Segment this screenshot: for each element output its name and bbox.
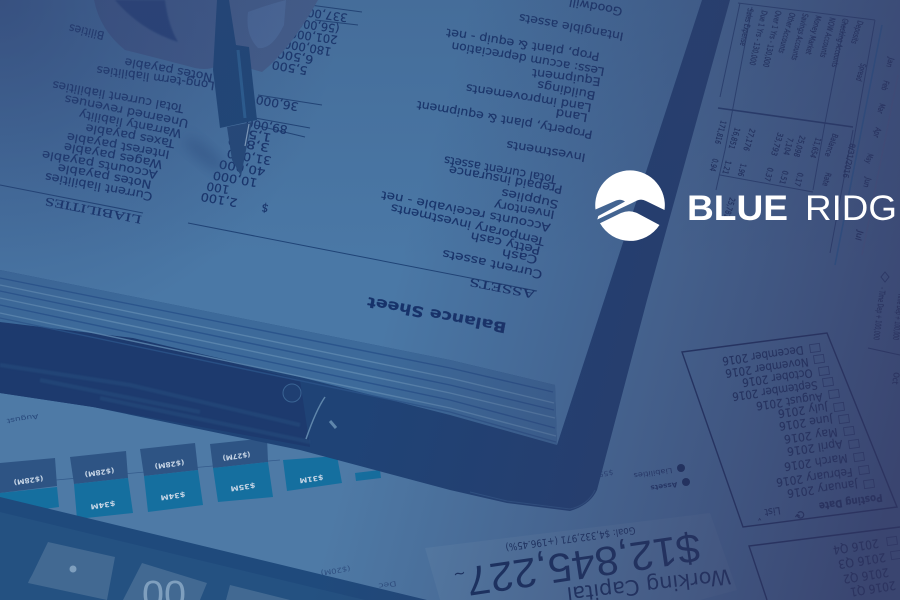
checklist labels: January 2016 — [786, 477, 859, 501]
thumb — [228, 0, 318, 72]
clip highlights — [0, 365, 310, 442]
table text: NOW Accounts — [818, 17, 837, 58]
nib highlight — [245, 124, 249, 146]
checklist labels: April 2016 — [786, 437, 844, 459]
liabilities column: Accounts payable — [41, 148, 159, 182]
assets column: Supplies — [500, 186, 560, 212]
quarter checklist panel — [749, 527, 900, 600]
legend labels: Assets — [650, 480, 678, 492]
amounts column: 3,800 — [227, 134, 271, 155]
table text: Jul — [853, 228, 865, 242]
bar values: $34M — [160, 490, 186, 501]
table text: 0.51 — [777, 169, 790, 185]
assets column: Temporary investments — [389, 201, 547, 249]
bar values: ($28M) — [154, 458, 185, 470]
assets column: Cash — [501, 246, 539, 267]
table text: 7,104 — [781, 136, 795, 156]
value trend mark: ~ — [452, 564, 467, 584]
bar values: ($27M) — [222, 450, 251, 462]
hand holding pen — [94, 0, 318, 72]
amounts column: 6,500 — [276, 47, 315, 67]
liabilities column: Notes payable — [57, 161, 153, 192]
legend labels — [598, 466, 678, 492]
checklist labels: June 2016 — [778, 412, 834, 433]
bar values: $35M — [230, 481, 256, 492]
table text: Rate — [820, 171, 833, 187]
liabilities column: Notes payable — [123, 55, 214, 85]
clip screw — [330, 421, 336, 428]
checklist labels: March 2016 — [783, 451, 849, 474]
color wash: top shade — [0, 0, 900, 260]
table text: 0.17 — [792, 171, 805, 187]
table text: Due 1 Yrs - 130,000 — [747, 10, 769, 66]
amounts column: 40,000 — [218, 157, 267, 179]
table text: 0.37 — [762, 166, 775, 182]
checklist labels: October 2016 — [741, 366, 814, 390]
assets column: Prepaid insurance — [448, 163, 564, 197]
table text: May — [863, 152, 875, 165]
liabilities column: Unearned revenues — [63, 92, 190, 131]
calculator keys — [28, 542, 290, 600]
bar values: $31M — [299, 473, 324, 484]
quarter labels: 2016 Q1 — [849, 578, 897, 599]
wordmark: RIDG — [805, 189, 897, 228]
assets column: ASSETS — [468, 275, 537, 302]
table text: Mar — [875, 102, 887, 115]
color wash: left corner shade — [0, 0, 360, 340]
assets column: Property, plant & equipment — [415, 98, 594, 142]
legend dots — [677, 464, 690, 486]
liabilities column: Interest payable — [66, 130, 171, 162]
checklist labels — [721, 343, 883, 522]
assets column: Investments — [505, 138, 586, 165]
logo mark — [595, 170, 665, 241]
liabilities column: Wages payable — [63, 140, 164, 172]
table text: Feb — [879, 79, 891, 92]
pen barrel — [213, 0, 257, 128]
finger shadow — [115, 0, 178, 42]
table text: 16,851 — [727, 126, 742, 150]
bar values: $34M — [90, 499, 116, 510]
checklist labels: December 2016 — [721, 343, 805, 368]
table text: 11,654 — [808, 136, 823, 159]
clipboard board — [0, 0, 730, 511]
quarter labels — [832, 536, 897, 599]
table text: Spread — [854, 62, 868, 82]
assets column: Accounts receivable - net — [379, 188, 552, 235]
amounts column: 180,000 — [283, 37, 333, 59]
assets column: Less: accum depreciation — [450, 39, 606, 79]
table text: 25,781 — [722, 196, 737, 219]
table text: Money Market — [804, 14, 823, 55]
amounts column: 201,000 — [289, 26, 338, 47]
assets column: Equipment — [531, 66, 601, 89]
table text: Sales Expense — [738, 8, 755, 47]
clip hinge — [306, 397, 325, 439]
quarter labels: 2016 Q3 — [837, 550, 887, 571]
assets bars — [0, 456, 381, 519]
balance sheet page — [0, 0, 702, 445]
table text: - Time Dep + 100,000 — [872, 287, 887, 340]
table text: 0.94 — [708, 157, 720, 172]
bar chart — [0, 412, 397, 590]
table text: Deposits — [849, 19, 865, 45]
liabilities column: Current liabilities — [44, 170, 154, 204]
amounts column: 5,500 — [271, 58, 309, 78]
clipboard edge sheen — [470, 490, 595, 509]
wordmark — [687, 189, 897, 228]
table text: 1.21 — [720, 159, 733, 175]
card background — [425, 513, 737, 600]
checklist labels: February 2016 — [775, 465, 854, 490]
assets column: Land improvements — [465, 81, 592, 115]
logo: Blue Ridge — [595, 170, 897, 241]
liabilities column: Total current liabilities — [51, 78, 186, 116]
pen nib — [227, 122, 252, 176]
bar values: ($28M) — [84, 466, 115, 478]
assets column — [366, 0, 625, 335]
quarter boxes — [886, 536, 900, 560]
assets column: Total current assets — [443, 153, 559, 187]
amounts column: 100 — [205, 179, 231, 197]
calculator — [0, 497, 427, 600]
table text: Over 1 Yrs - 130,000 — [761, 10, 783, 68]
checklist boxes — [809, 343, 875, 489]
assets column: Buildings — [536, 78, 597, 103]
pen shadow — [180, 132, 230, 178]
checklist labels: July 2016 — [777, 400, 829, 421]
table text: Balance — [823, 132, 840, 158]
ruled lines — [0, 5, 537, 291]
thumb nail — [247, 0, 286, 48]
fountain pen — [213, 0, 257, 176]
bar values: ($28M) — [13, 474, 44, 486]
amounts column: 337,000 — [299, 4, 348, 25]
assets column: Intangible assets — [518, 11, 625, 44]
checklist labels: May 2016 — [783, 425, 839, 446]
wordmark: BLUE — [687, 189, 788, 228]
assets column: Petty cash — [469, 229, 542, 258]
goal text: Goal: $4,332,971 (+196.45%) — [505, 524, 636, 552]
assets column: Prop, plant & equip - net — [445, 26, 600, 64]
checklist labels: Posting Date — [818, 491, 883, 512]
quarter labels: 2016 Q4 — [832, 536, 880, 557]
checklist labels: November 2016 — [724, 355, 810, 381]
checklist frame — [682, 333, 897, 527]
page surface — [0, 0, 702, 445]
checklist labels: ⟳ — [794, 507, 806, 522]
amounts column: 36,000 — [255, 93, 300, 114]
working capital card — [425, 513, 737, 600]
assets column: Balance Sheet — [366, 293, 508, 335]
calculator body — [0, 497, 427, 600]
amounts column: 89,000 — [245, 116, 289, 137]
table text: Jun — [861, 176, 873, 189]
liabilities column: LIABILITIES — [44, 194, 143, 227]
table text: 1.96 — [736, 162, 748, 177]
table text: Checking Accounts — [830, 18, 850, 68]
calculator faceplate — [0, 512, 365, 600]
liabilities column: Bilities — [67, 21, 106, 43]
amounts column: 2,100 — [200, 190, 239, 210]
amounts column — [200, 4, 348, 216]
table text: 25,098 — [792, 134, 807, 158]
table text: 27,176 — [741, 127, 757, 152]
amounts column: $ — [260, 201, 270, 216]
financial table at upper right — [708, 3, 900, 385]
assets column: Land — [555, 106, 588, 125]
liabilities column — [41, 21, 215, 227]
table text: 8/31/2016 — [841, 143, 857, 179]
amounts column: (56,000) — [291, 15, 340, 36]
key dot — [70, 566, 76, 572]
liabilities column: Long-term liabilities — [96, 63, 215, 93]
month label: August — [5, 412, 39, 425]
lower axis labels: ($20M) — [320, 564, 351, 577]
clip bar — [0, 322, 310, 447]
binder clip — [0, 322, 336, 447]
amounts column: 31,000 — [226, 146, 273, 168]
liabilities column: Warranty liability — [78, 107, 183, 141]
quarter labels: 2016 Q2 — [842, 565, 890, 586]
index finger — [94, 0, 232, 69]
checklist labels: ˅ — [756, 510, 762, 521]
lower axis labels: Dec — [378, 579, 397, 590]
amounts column: 1,500 — [229, 124, 273, 145]
bar values — [13, 450, 324, 510]
legend labels: $55 — [598, 468, 614, 478]
amounts column: 10,000 — [212, 168, 259, 190]
chart marker — [881, 272, 889, 282]
checklist labels: August 2016 — [755, 390, 824, 413]
barrel highlight — [238, 50, 245, 118]
chart baseline — [0, 460, 280, 485]
clip rivet — [283, 384, 301, 402]
paper stack edge — [0, 270, 557, 445]
page edge lines — [0, 278, 556, 442]
table text: 171,816 — [713, 119, 728, 145]
checklist labels: List — [764, 504, 781, 517]
posting date checklist panel — [682, 333, 897, 527]
table text: Savings Accounts — [789, 13, 810, 61]
table text — [708, 8, 900, 385]
liabilities column: Taxes payable — [84, 121, 177, 151]
table text: Jan — [884, 56, 896, 69]
clipboard — [0, 0, 730, 511]
legend labels: Liabilities — [633, 466, 673, 479]
lower axis labels — [320, 564, 397, 590]
table text: 33,793 — [769, 131, 785, 157]
liabilities bars — [0, 438, 268, 493]
table text: Apr — [871, 126, 883, 139]
quarter frame — [749, 527, 900, 600]
assets column: Current assets — [441, 247, 544, 282]
chart legend — [598, 464, 690, 492]
table text: Other Accounts — [777, 11, 797, 54]
assets column: Inventory — [493, 198, 555, 222]
checklist labels: September 2016 — [731, 378, 819, 404]
